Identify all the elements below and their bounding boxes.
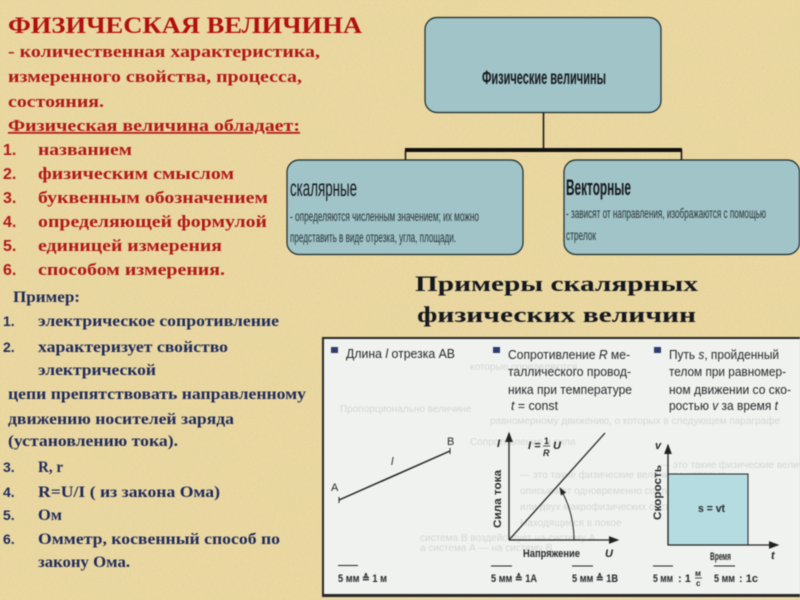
ghost text showing through: а система А — на систему В [420, 543, 553, 554]
heading: scalar examples: Примеры скалярных [415, 271, 698, 296]
box: scalar: представить в виде отрезка, угла, площади. [290, 229, 456, 245]
numbered list: example: 4. [3, 484, 15, 500]
ghost text showing through: или двух макрофизических систем [520, 501, 682, 513]
definition paragraph: измеренного свойства, процесса, [8, 67, 302, 86]
chart: segment AB [331, 436, 454, 585]
chart: current vs voltage: U [553, 440, 562, 452]
chart: speed vs time: : 1с [739, 573, 758, 585]
bullet text: length: Длина l отрезка АВ [346, 347, 455, 361]
bullet text: path: Путь s, пройденный [669, 348, 779, 362]
ghost text showing through: — это такие физические величины, которые [520, 469, 726, 481]
ghost text showing through: которые определяются [470, 362, 577, 373]
bullet text: resistance: ника при температуре [508, 383, 632, 397]
numbered list: properties: 6. [3, 262, 16, 279]
chart: speed vs time: v [655, 440, 662, 452]
chart: current vs voltage: 5 мм ≙ 1В [572, 572, 618, 585]
chart: speed vs time: s = vt [698, 503, 725, 515]
numbered list: properties: физическим смыслом [38, 164, 234, 183]
chart: speed vs time: с [696, 579, 701, 588]
bullet text: path: телом при равномер- [669, 365, 786, 379]
chart: current vs voltage: I [497, 438, 501, 450]
numbered list: properties: определяющей формулой [38, 212, 267, 231]
bullet text: resistance: t = const [511, 399, 559, 413]
numbered list: example: электрическое сопротивление [38, 313, 279, 330]
chart: current vs voltage: Напряжение [523, 548, 580, 560]
ghost text showing through: Находящиеся в покое [520, 518, 622, 529]
ghost text showing through: описывают одновременно состояние [520, 486, 693, 497]
chart: current vs voltage: I = [528, 440, 541, 452]
bullet text: resistance: таллического провод- [508, 365, 631, 379]
chart: current vs voltage: 1 [544, 436, 549, 446]
ghost text showing through: Сопротивление и сила [470, 437, 576, 448]
chart: current vs voltage: Сила тока [492, 469, 504, 528]
box: scalar [287, 160, 523, 254]
numbered list: example: движению носителей заряда [8, 411, 234, 428]
numbered list: properties: 1. [3, 142, 16, 159]
chart: speed vs time: 5 мм [714, 573, 735, 585]
heading: scalar examples: физических величин [417, 302, 696, 327]
numbered list: properties: 4. [3, 214, 16, 231]
numbered list: example [3, 313, 306, 571]
box: physical quantities [425, 18, 661, 112]
chart: speed vs time: м [695, 569, 701, 578]
connectors [405, 112, 682, 160]
numbered list: example: Ом [38, 507, 62, 524]
numbered list: example: R=U/I ( из закона Ома) [38, 484, 220, 501]
numbered list: example: 1. [3, 313, 15, 329]
ghost text showing through: система В воздействует на систему А [420, 533, 596, 544]
diagram: classification tree [287, 18, 800, 254]
box: vector [564, 160, 800, 254]
chart: speed vs time [652, 440, 778, 588]
numbered list: example: R, r [38, 459, 63, 476]
bullet text: path [654, 347, 791, 413]
chart: speed vs time: t [771, 550, 776, 562]
panel: definition text [3, 13, 362, 279]
numbered list: properties: 5. [3, 238, 16, 255]
numbered list: properties: единицей измерения [38, 236, 222, 255]
chart: current vs voltage: 5 мм ≙ 1А [491, 572, 537, 585]
chart: speed vs time: Время [710, 551, 731, 563]
ghost text showing through: равномерному движению, о которых в следующем параграфе [490, 415, 780, 427]
numbered list: example: 3. [3, 459, 15, 475]
chart: segment AB: 5 мм ≙ 1 м [338, 572, 387, 585]
numbered list: example: электрической [38, 362, 156, 379]
numbered list: example: Омметр, косвенный способ по [38, 531, 280, 548]
numbered list: example: 6. [3, 531, 15, 547]
panel: example text [3, 289, 306, 571]
box: vector: Векторные [566, 175, 631, 200]
numbered list: properties: 2. [3, 166, 16, 183]
bullet text: resistance [493, 347, 632, 413]
heading: scalar examples [415, 271, 698, 327]
box: scalar: - определяются численным значением; их можно [290, 208, 479, 224]
chart: current vs voltage [491, 433, 618, 585]
ghost text showing through [340, 362, 800, 554]
numbered list: example: характеризует свойство [38, 339, 228, 356]
bullet text: path: ном движении со ско- [669, 383, 791, 397]
numbered list: properties [3, 140, 268, 279]
numbered list: example: цепи препятствовать направленному [8, 386, 306, 403]
bullet text: resistance: Сопротивление R ме- [508, 348, 630, 362]
chart: segment AB: В [447, 436, 454, 448]
numbered list: example: закону Ома. [38, 554, 130, 571]
chart: current vs voltage: U [605, 548, 614, 560]
chart: segment AB: l [391, 456, 394, 468]
chart: segment AB: А [331, 482, 339, 494]
title: ФИЗИЧЕСКАЯ ВЕЛИЧИНА [8, 13, 362, 38]
chart: current vs voltage: R [543, 448, 550, 458]
chart: speed vs time: : 1 [678, 573, 691, 585]
chart: speed vs time: 5 мм [653, 573, 673, 585]
definition paragraph: - количественная характеристика, [8, 42, 320, 61]
box: scalar: скалярные [290, 175, 357, 201]
ghost text showing through: Пропорционально величине [340, 404, 472, 415]
example heading: Пример: [13, 289, 80, 306]
numbered list: example: 5. [3, 507, 15, 523]
numbered list: example: 2. [3, 339, 15, 355]
numbered list: properties: буквенным обозначением [38, 188, 268, 207]
box: vector: стрелок [566, 227, 597, 243]
numbered list: example: (установлению тока). [8, 433, 178, 450]
definition paragraph: состояния. [8, 92, 104, 111]
numbered list: properties: 3. [3, 190, 16, 207]
box: physical quantities: Физические величины [482, 68, 606, 89]
numbered list: properties: способом измерения. [38, 260, 225, 279]
chart: speed vs time: Скорость [652, 465, 664, 520]
bullet text: path: ростью v за время t [669, 399, 778, 413]
definition paragraph [8, 42, 320, 111]
panel: scanned textbook examples [322, 337, 800, 597]
subheading: properties: Физическая величина обладает: [8, 116, 300, 135]
numbered list: properties: названием [38, 140, 132, 159]
